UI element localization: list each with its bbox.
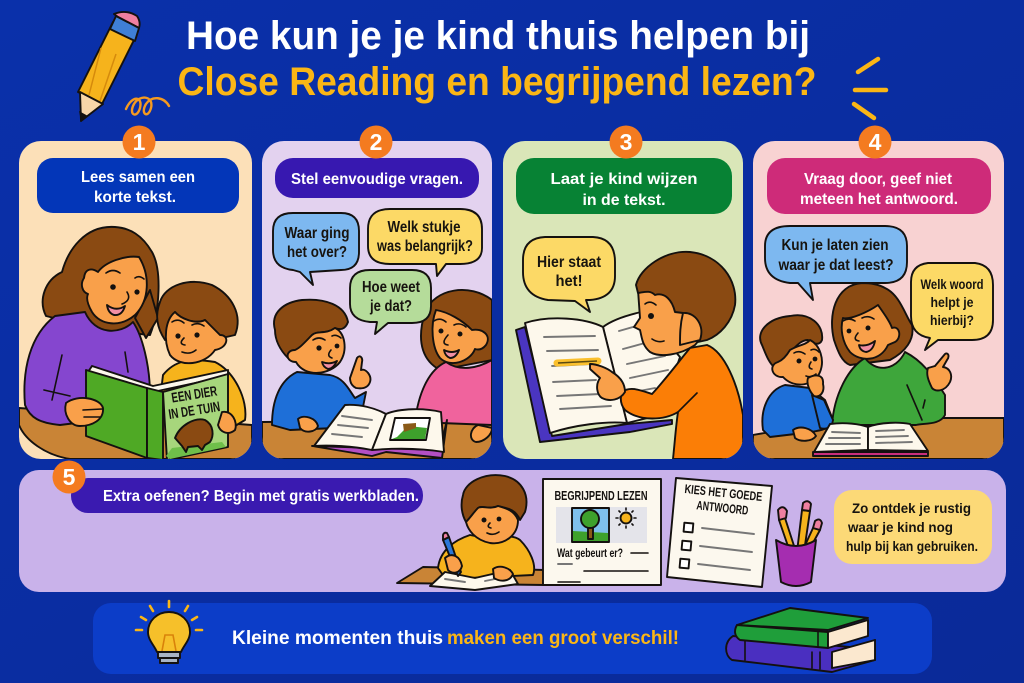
illustration: mother and child reading bbox=[19, 227, 252, 460]
speech bubble: waar ging het over: het over? bbox=[287, 244, 347, 261]
speech bubble: hier staat het: Hier staat bbox=[537, 254, 601, 271]
icon: pencil cup bbox=[776, 501, 822, 586]
worksheet: begrijpend lezen: Wat gebeurt er? bbox=[557, 548, 623, 560]
banner text: maken een groot verschil! bbox=[447, 628, 679, 649]
speech bubble: kun je laten zien: waar je dat leest? bbox=[778, 257, 894, 274]
icon: stack of books bbox=[726, 608, 875, 672]
banner text: Kleine momenten thuis bbox=[232, 628, 443, 649]
illustration: mother and child reading: EEN DIER bbox=[170, 383, 218, 406]
callout: zo ontdek je rustig: hulp bij kan gebruiken. bbox=[846, 538, 978, 554]
callout: zo ontdek je rustig: Zo ontdek je rustig bbox=[852, 500, 971, 516]
heading pill 3: in de tekst. bbox=[582, 192, 666, 209]
speech bubble: kun je laten zien: Kun je laten zien bbox=[782, 237, 888, 254]
speech bubble: kun je laten zien bbox=[765, 226, 907, 300]
heading pill 1: korte tekst. bbox=[94, 189, 176, 206]
heading pill 1: Lees samen een bbox=[81, 169, 195, 186]
heading pill 4: meteen het antwoord. bbox=[800, 191, 958, 208]
number badges: 1 bbox=[133, 129, 146, 155]
speech bubble: welk woord: hierbij? bbox=[930, 312, 974, 328]
callout: zo ontdek je rustig bbox=[834, 490, 992, 564]
speech bubble: hoe weet je dat: Hoe weet bbox=[362, 279, 420, 296]
worksheet: kies het goede antwoord: KIES HET GOEDE bbox=[684, 482, 763, 504]
speech bubble: welk stukje: Welk stukje bbox=[388, 219, 461, 236]
heading pill 3 bbox=[516, 158, 732, 214]
heading pill 3: Laat je kind wijzen bbox=[550, 171, 698, 188]
icon: sparkle lines bbox=[854, 59, 886, 118]
panel 1: lees samen bbox=[19, 141, 252, 460]
heading pill 5 bbox=[71, 478, 423, 513]
worksheet: kies het goede antwoord bbox=[667, 478, 772, 587]
worksheet: begrijpend lezen bbox=[543, 479, 661, 585]
number badges: 2 bbox=[370, 129, 382, 155]
badge 5: 5 bbox=[63, 464, 76, 490]
icon: squiggle bbox=[126, 98, 169, 115]
speech bubble: hier staat het: het! bbox=[556, 273, 582, 290]
speech bubble: hier staat het bbox=[523, 237, 615, 312]
illustration: mother and child reading: IN DE TUIN bbox=[167, 398, 221, 422]
illustration: child pointing in book bbox=[516, 252, 743, 459]
heading pill 4 bbox=[767, 158, 991, 214]
illustration: mother and thinking child bbox=[753, 283, 1004, 459]
panel 2: stel vragen bbox=[262, 141, 492, 459]
title bbox=[178, 14, 816, 104]
illustration: child doing worksheet bbox=[397, 475, 545, 590]
badge 5 bbox=[52, 460, 86, 494]
icon: light bulb bbox=[136, 601, 202, 663]
speech bubble: welk woord: helpt je bbox=[930, 294, 974, 310]
panel 3: laat wijzen bbox=[503, 141, 743, 459]
callout: zo ontdek je rustig: waar je kind nog bbox=[847, 519, 953, 535]
speech bubble: hoe weet je dat bbox=[350, 270, 431, 334]
panel 5: extra oefenen bbox=[19, 460, 1006, 592]
heading pill 5: Extra oefenen? Begin met gratis werkbladen. bbox=[103, 488, 419, 505]
number badges: 4 bbox=[869, 129, 882, 155]
heading pill 2 bbox=[275, 158, 479, 198]
speech bubble: hoe weet je dat: je dat? bbox=[369, 298, 412, 315]
speech bubble: waar ging het over: Waar ging bbox=[284, 225, 350, 242]
heading pill 1 bbox=[37, 158, 239, 213]
worksheet: begrijpend lezen: BEGRIJPEND LEZEN bbox=[554, 488, 648, 503]
title: Close Reading en begrijpend lezen? bbox=[178, 60, 816, 104]
panel 4: vraag door bbox=[753, 141, 1004, 459]
speech bubble: waar ging het over bbox=[273, 213, 359, 285]
speech bubble: welk stukje bbox=[368, 209, 482, 276]
heading pill 4: Vraag door, geef niet bbox=[804, 171, 953, 188]
bottom banner bbox=[93, 601, 932, 674]
heading pill 2: Stel eenvoudige vragen. bbox=[291, 171, 463, 188]
title: Hoe kun je je kind thuis helpen bij bbox=[186, 14, 810, 58]
number badges bbox=[122, 126, 892, 158]
illustration: child and mother with book bbox=[262, 290, 492, 459]
speech bubble: welk woord bbox=[911, 263, 993, 350]
number badges: 3 bbox=[620, 129, 632, 155]
icon: pencil bbox=[78, 12, 140, 121]
worksheet: kies het goede antwoord: ANTWOORD bbox=[696, 498, 749, 518]
speech bubble: welk woord: Welk woord bbox=[920, 276, 984, 292]
banner text bbox=[232, 628, 679, 649]
speech bubble: welk stukje: was belangrijk? bbox=[376, 238, 473, 255]
